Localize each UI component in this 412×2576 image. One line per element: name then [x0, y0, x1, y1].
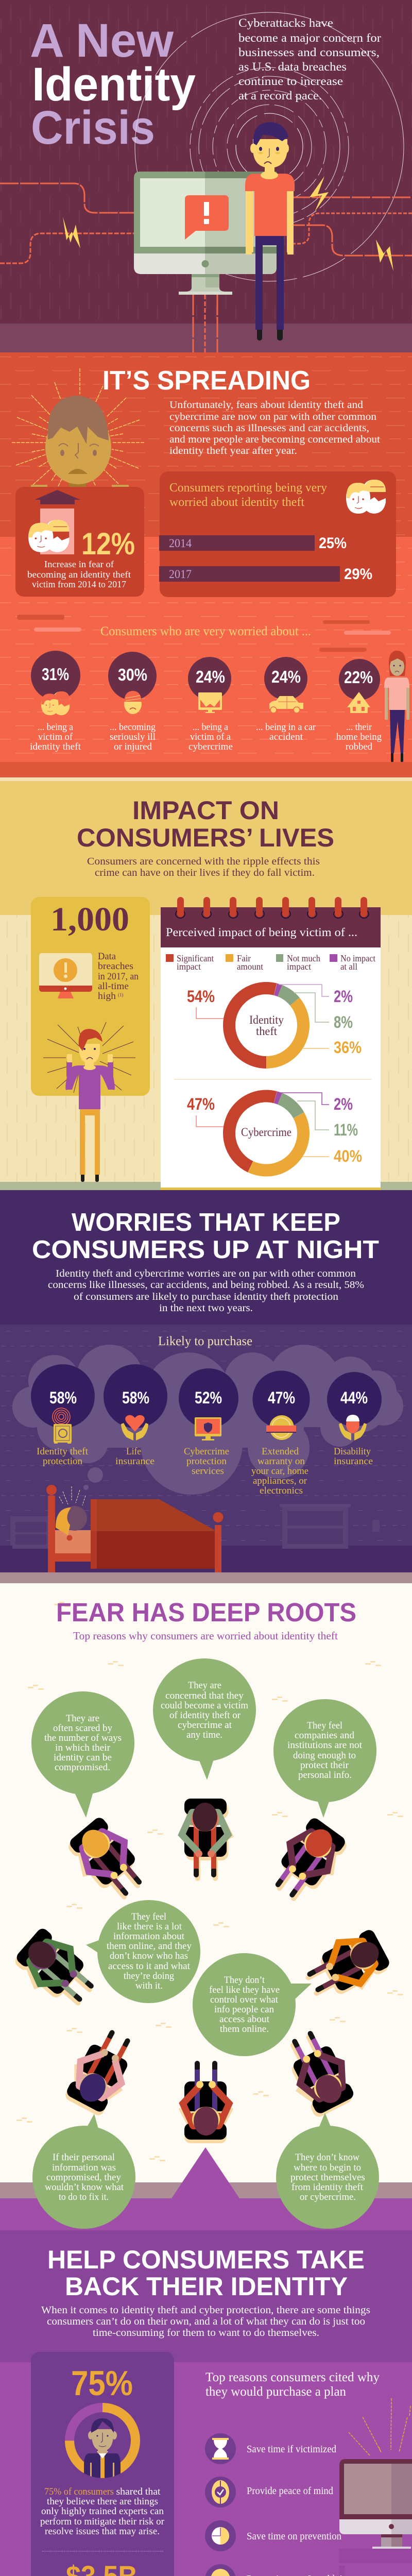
stat: seriously ill 30%: 30% [118, 665, 147, 684]
speech bubble 4: information about [113, 1931, 185, 1942]
title: Crisis [31, 101, 155, 154]
panel: fear has deep roots [0, 1583, 412, 2230]
caption [27, 559, 131, 589]
speech bubble 4: access to it and what [108, 1961, 191, 1972]
intro text: at a record pace. [238, 89, 322, 102]
stat: extended warranty 47%: 47% [268, 1388, 295, 1407]
speech bubble 7: from identity theft [291, 2182, 364, 2193]
panel: perceived impact chart [161, 897, 381, 1190]
speech bubble 2 [153, 1658, 256, 1780]
stat: cybercrime protection 52%: protection [186, 1456, 227, 1467]
speech bubble 1: the number of ways [44, 1733, 122, 1743]
speech bubble 5: them online. [220, 2024, 269, 2035]
panel: 75% and $3.5B stats [31, 2352, 174, 2576]
icon: lightning bolts [63, 176, 393, 271]
paragraph [41, 2304, 370, 2338]
speech bubble 3: personal info. [298, 1770, 352, 1781]
speech bubble 7: or cybercrime. [300, 2192, 356, 2202]
legend: No impact [340, 953, 375, 963]
icon: house [347, 692, 370, 713]
paragraph: in the next two years. [159, 1302, 253, 1314]
panel: 12% increase [15, 487, 144, 597]
legend: impact [287, 961, 311, 972]
speech bubble 1: often scared by [53, 1723, 113, 1734]
panel: hero [0, 0, 412, 352]
stat: cybercrime 24%: victim of a [190, 732, 231, 742]
intro text [238, 16, 381, 102]
stat: 1,000: 1,000 [50, 901, 129, 938]
title: Identity [32, 58, 196, 111]
heading: HELP CONSUMERS TAKE [47, 2245, 365, 2274]
speech bubble 4: like there is a lot [117, 1922, 182, 1932]
speech bubble 4: don’t know who has [110, 1951, 188, 1961]
icon: computer monitor with alert [134, 172, 277, 295]
ray burst [348, 2398, 410, 2455]
legend: Significant [177, 953, 214, 963]
intro text: as U.S. data breaches [238, 60, 347, 73]
stat: seriously ill 30%: ... becoming [110, 722, 156, 733]
paragraph: cybercrime are now on par with other common [169, 411, 376, 422]
nightstands [10, 1504, 380, 1549]
paragraph: concerns like illnesses, car accidents, and being robbed. As a result, 58% [48, 1279, 364, 1291]
paragraph: of consumers are likely to purchase identity theft protection [74, 1291, 338, 1302]
donut chart: identity theft: Identity [249, 1013, 284, 1026]
speech bubble 4 [86, 1900, 200, 2003]
paragraph: and more people are becoming concerned about [169, 434, 380, 445]
stat: seriously ill 30%: seriously ill [110, 732, 156, 742]
subheading [205, 2370, 380, 2399]
icon: warranty badge [266, 1415, 296, 1440]
subheading: they would purchase a plan [205, 2385, 346, 2399]
stat: 12%: 12% [81, 527, 135, 561]
paragraph: consumers can’t do on their own, and a lot of what they can do is just too [47, 2316, 365, 2327]
stat: life insurance 58%: Life [126, 1447, 141, 1457]
stat: disability insurance 44% [327, 1372, 382, 1467]
stat caption: in 2017, an [98, 972, 139, 982]
bar 2017 [159, 566, 372, 583]
stat: life insurance 58%: insurance [115, 1456, 154, 1467]
donut chart: cybercrime: Cybercrime [241, 1126, 291, 1139]
stat: identity theft protection 58% [31, 1364, 95, 1467]
illustration: monitor on desk [339, 2459, 412, 2576]
heading [32, 1209, 379, 1264]
icon: masked monitor [198, 692, 222, 713]
donut chart: identity theft: 2% [334, 987, 353, 1006]
stat: extended warranty 47%: your car, home [251, 1466, 308, 1477]
stat: seriously ill 30%: or injured [114, 742, 152, 752]
heading [77, 796, 334, 852]
bar 2014: 2014 [169, 537, 192, 550]
stat caption: all-time [98, 981, 129, 992]
donut chart: identity theft: 54% [187, 987, 215, 1006]
speech bubble 2: They are [188, 1681, 221, 1691]
paragraph [87, 856, 320, 878]
legend: impact [177, 961, 201, 972]
illustration: bed with sleepless person [46, 1485, 224, 1572]
speech bubble 4: with it. [135, 1981, 163, 1991]
donut chart: 75% with man [70, 2408, 135, 2481]
stat: disability insurance 44%: insurance [334, 1456, 373, 1467]
paragraph: When it comes to identity theft and cyber protection, there are some things [41, 2304, 370, 2316]
reason: save time on prevention: Save time on prevention [247, 2531, 341, 2542]
bar 2017: 29% [344, 566, 372, 583]
legend: amount [237, 961, 263, 972]
stat: 75%: 75% [71, 2364, 133, 2403]
speech bubble 7: They don’t know [295, 2153, 360, 2163]
speech bubble 2: of identity theft or [169, 1710, 241, 1721]
speech bubble 1: compromised. [55, 1762, 110, 1773]
speech bubble 2: could become a victim [161, 1701, 249, 1711]
panel: worries that keep consumers up at night [0, 1190, 412, 1583]
stat caption: high [98, 991, 116, 1002]
caption: becoming an identity theft [27, 569, 131, 580]
stat: cybercrime 24%: 24% [196, 667, 225, 686]
speech bubble 3: They feel [307, 1721, 342, 1731]
stat: car accident 24%: ... being in a car [256, 722, 316, 733]
stat: home robbed 22%: robbed [346, 742, 373, 752]
caption: Increase in fear of [44, 559, 114, 569]
stat: home robbed 22% [336, 659, 382, 752]
speech bubble 5: access about [219, 2014, 270, 2025]
paragraph: crime can have on their lives if they do fall victim. [95, 867, 315, 878]
heading: IMPACT ON [132, 796, 279, 825]
stat: cybercrime 24% [188, 657, 233, 752]
stat caption: they believe there are things [47, 2497, 158, 2507]
stat: identity theft 31% [30, 651, 81, 752]
donut chart: cybercrime: 11% [334, 1121, 358, 1139]
bar 2017: 2017 [169, 568, 192, 581]
speech bubble 5: control over what [210, 1995, 279, 2005]
icon: car [269, 696, 303, 713]
stat: identity theft 31%: ... being a [38, 722, 73, 733]
icon: shield monitor [195, 1417, 221, 1440]
reason: save time on prevention [205, 2520, 341, 2551]
paragraph: Consumers are concerned with the ripple effects this [87, 856, 320, 867]
subheading: Consumers who are very worried about ... [100, 624, 311, 638]
stat: extended warranty 47%: appliances, or [253, 1476, 307, 1486]
stat: extended warranty 47%: Extended [262, 1447, 299, 1457]
stat: cybercrime 24%: ... being a [193, 722, 228, 733]
paragraph [48, 1268, 364, 1314]
stat caption: (1) [118, 992, 124, 997]
bar 2014 [159, 535, 347, 552]
paragraph: identity theft year after year. [169, 445, 297, 456]
heading: CONSUMERS UP AT NIGHT [32, 1236, 379, 1264]
icon: heart in hands [121, 1415, 148, 1440]
icon: fingerprint safe [53, 1408, 72, 1444]
subheading: Top reasons consumers cited why [205, 2370, 380, 2384]
character: shocked man [43, 1022, 135, 1182]
stat: identity theft protection 58%: Identity theft [37, 1447, 89, 1457]
paragraph: concerns such as illnesses and car accidents, [169, 422, 369, 434]
stat caption: 75% of consumers [44, 2487, 114, 2497]
stat: disability insurance 44%: 44% [340, 1388, 368, 1407]
intro text: become a major concern for [238, 31, 381, 44]
speech bubble 6: If their personal [53, 2153, 115, 2163]
icon: ray burst [12, 368, 144, 486]
stat caption: shared that [116, 2487, 161, 2497]
caption: victim from 2014 to 2017 [32, 579, 126, 589]
reason: save time if victimized [205, 2433, 336, 2464]
stat: disability insurance 44%: Disability [334, 1447, 371, 1457]
purple triangle [171, 2147, 239, 2198]
chart title [169, 481, 327, 509]
stat: home robbed 22%: 22% [344, 668, 373, 687]
donut chart: identity theft: theft [256, 1025, 278, 1038]
stat: cybercrime 24%: cybercrime [188, 742, 233, 752]
speech bubble 1: identity can be [54, 1753, 112, 1763]
stat: seriously ill 30% [108, 652, 157, 752]
stat: extended warranty 47%: warranty on [258, 1456, 305, 1467]
stat: cybercrime protection 52% [179, 1368, 238, 1477]
heading [47, 2245, 365, 2301]
chart title: Consumers reporting being very [169, 481, 327, 495]
stat caption: breaches [98, 961, 133, 972]
stat: cybercrime protection 52%: Cybercrime [184, 1447, 229, 1457]
panel: help consumers take back their identity [0, 2230, 412, 2576]
bar 2014: 25% [319, 535, 347, 552]
speech bubble 6: compromised, they [46, 2173, 122, 2183]
donut chart: identity theft [187, 973, 362, 1077]
stat: car accident 24% [256, 657, 316, 742]
title [30, 14, 196, 154]
stat: identity theft protection 58%: 58% [49, 1388, 77, 1407]
speech bubble 1 [31, 1691, 134, 1818]
stat caption [40, 2487, 164, 2537]
speech bubble 4: they’re doing [124, 1971, 174, 1981]
subheading: Likely to purchase [158, 1334, 252, 1348]
speech bubble 5: feel like they have [209, 1985, 280, 1995]
speech bubble 3: institutions are not [287, 1740, 363, 1751]
thought cloud [12, 1345, 403, 1495]
panel: impact on consumers' lives [0, 777, 412, 1190]
speech bubble 4: them online, and they [107, 1941, 192, 1952]
stat: cybercrime protection 52%: services [192, 1466, 224, 1477]
panel: data breaches [31, 897, 150, 1096]
icon: two faces [28, 520, 69, 552]
heading: WORRIES THAT KEEP [72, 1209, 340, 1236]
stat: life insurance 58% [104, 1364, 167, 1467]
intro text: businesses and consumers, [238, 46, 380, 59]
icon: up arrow [35, 490, 80, 504]
chart title: Perceived impact of being victim of ... [166, 926, 357, 939]
donut chart: cybercrime: 40% [334, 1147, 362, 1165]
speech bubble 5: info people can [214, 2005, 274, 2015]
heading: CONSUMERS’ LIVES [77, 823, 334, 852]
paragraph: Unfortunately, fears about identity theft and [169, 399, 363, 411]
alert speech bubble [185, 195, 229, 240]
character: worried woman [384, 651, 409, 762]
intro text: continue to increase [238, 75, 343, 88]
donut chart: cybercrime: 47% [187, 1095, 215, 1113]
concentric alarm rings [135, 12, 404, 281]
speech bubble 6: information was [52, 2163, 116, 2173]
circuit wires [0, 183, 412, 352]
character: worried man [245, 122, 295, 341]
panel: consumers very worried bar chart [159, 471, 396, 597]
title: A New [30, 14, 174, 67]
stat: identity theft 31%: identity theft [30, 742, 81, 752]
icon: alert monitor [39, 953, 92, 998]
speech bubble 3: companies and [295, 1731, 355, 1741]
legend: at all [340, 961, 357, 972]
paragraph: time-consuming for them to want to do themselves. [93, 2327, 319, 2338]
stat caption [98, 952, 139, 1002]
speech bubble 2: any time. [186, 1730, 222, 1740]
icon: injured head [124, 691, 142, 714]
heading: BACK THEIR IDENTITY [65, 2272, 348, 2301]
speech bubble 6: wouldn’t know what [45, 2182, 124, 2193]
speech bubble 6 [32, 2114, 135, 2229]
speech bubble 3 [273, 1699, 376, 1818]
speech bubble 5: They don’t [224, 1975, 265, 1986]
paragraph [169, 399, 380, 456]
speech bubble 5 [193, 1953, 312, 2056]
stat: cybercrime protection 52%: 52% [195, 1388, 222, 1407]
reason: provide peace of mind [205, 2477, 333, 2507]
notebook rings [176, 897, 369, 918]
speech bubble 7 [276, 2113, 379, 2229]
reason: save time if victimized: Save time if victimized [247, 2444, 336, 2455]
chart title: worried about identity theft [169, 496, 304, 509]
speech bubble 7: where to begin to [294, 2163, 361, 2173]
icon: two faces [346, 480, 386, 514]
reason: provide peace of mind: Provide peace of mind [247, 2486, 333, 2497]
stat: identity theft 31%: victim of [38, 732, 73, 742]
stat caption: Data [98, 952, 116, 962]
stat: identity theft 31%: 31% [42, 665, 69, 684]
donut chart: identity theft: 36% [334, 1038, 362, 1057]
speech bubble 6: to do to fix it. [59, 2192, 109, 2202]
stat caption: perform to mitigate their risk or [40, 2517, 164, 2527]
heading: FEAR HAS DEEP ROOTS [56, 1598, 356, 1627]
stat: home robbed 22%: home being [336, 732, 382, 742]
donut chart: cybercrime: 2% [334, 1095, 353, 1113]
stat: extended warranty 47% [251, 1370, 310, 1496]
legend: Not much [287, 953, 320, 963]
intro text: Cyberattacks have [238, 16, 333, 29]
stat caption: only highly trained experts can [41, 2506, 164, 2517]
speech bubble 2: cybercrime at [178, 1720, 232, 1731]
speech bubble 1: in which their [55, 1743, 110, 1753]
legend [166, 953, 375, 972]
stat caption: resolve issues that may arise. [45, 2527, 160, 2537]
stat: identity theft protection 58%: protection [43, 1456, 82, 1467]
subheading: Top reasons why consumers are worried about identity theft [73, 1630, 338, 1642]
donut chart: cybercrime [187, 1083, 362, 1183]
stat: car accident 24%: accident [269, 732, 303, 742]
speech bubble 3: doing enough to [293, 1751, 356, 1761]
character: scared face [31, 396, 129, 492]
speech bubble 7: protect themselves [290, 2173, 365, 2183]
seated people [10, 1799, 392, 2143]
icon: two faces [41, 691, 70, 715]
speech bubble 4: They feel [131, 1912, 166, 1922]
reason: protect in ways I couldn't [205, 2564, 390, 2576]
stat: home robbed 22%: ... their [346, 722, 372, 733]
panel: it's spreading [0, 352, 412, 777]
heading: IT’S SPREADING [102, 366, 311, 396]
paragraph: Identity theft and cybercrime worries are on par with other common [56, 1268, 356, 1279]
legend: Fair [237, 953, 251, 963]
stat: extended warranty 47%: electronics [260, 1486, 303, 1496]
speech bubble 2: concerned that they [165, 1691, 244, 1701]
speech bubble 3: protect their [300, 1760, 349, 1771]
icon: injured head in hands [339, 1415, 367, 1440]
speech bubble 1: They are [66, 1714, 99, 1724]
stat: life insurance 58%: 58% [122, 1388, 149, 1407]
donut chart: identity theft: 8% [334, 1013, 353, 1031]
stat: car accident 24%: 24% [271, 667, 301, 686]
